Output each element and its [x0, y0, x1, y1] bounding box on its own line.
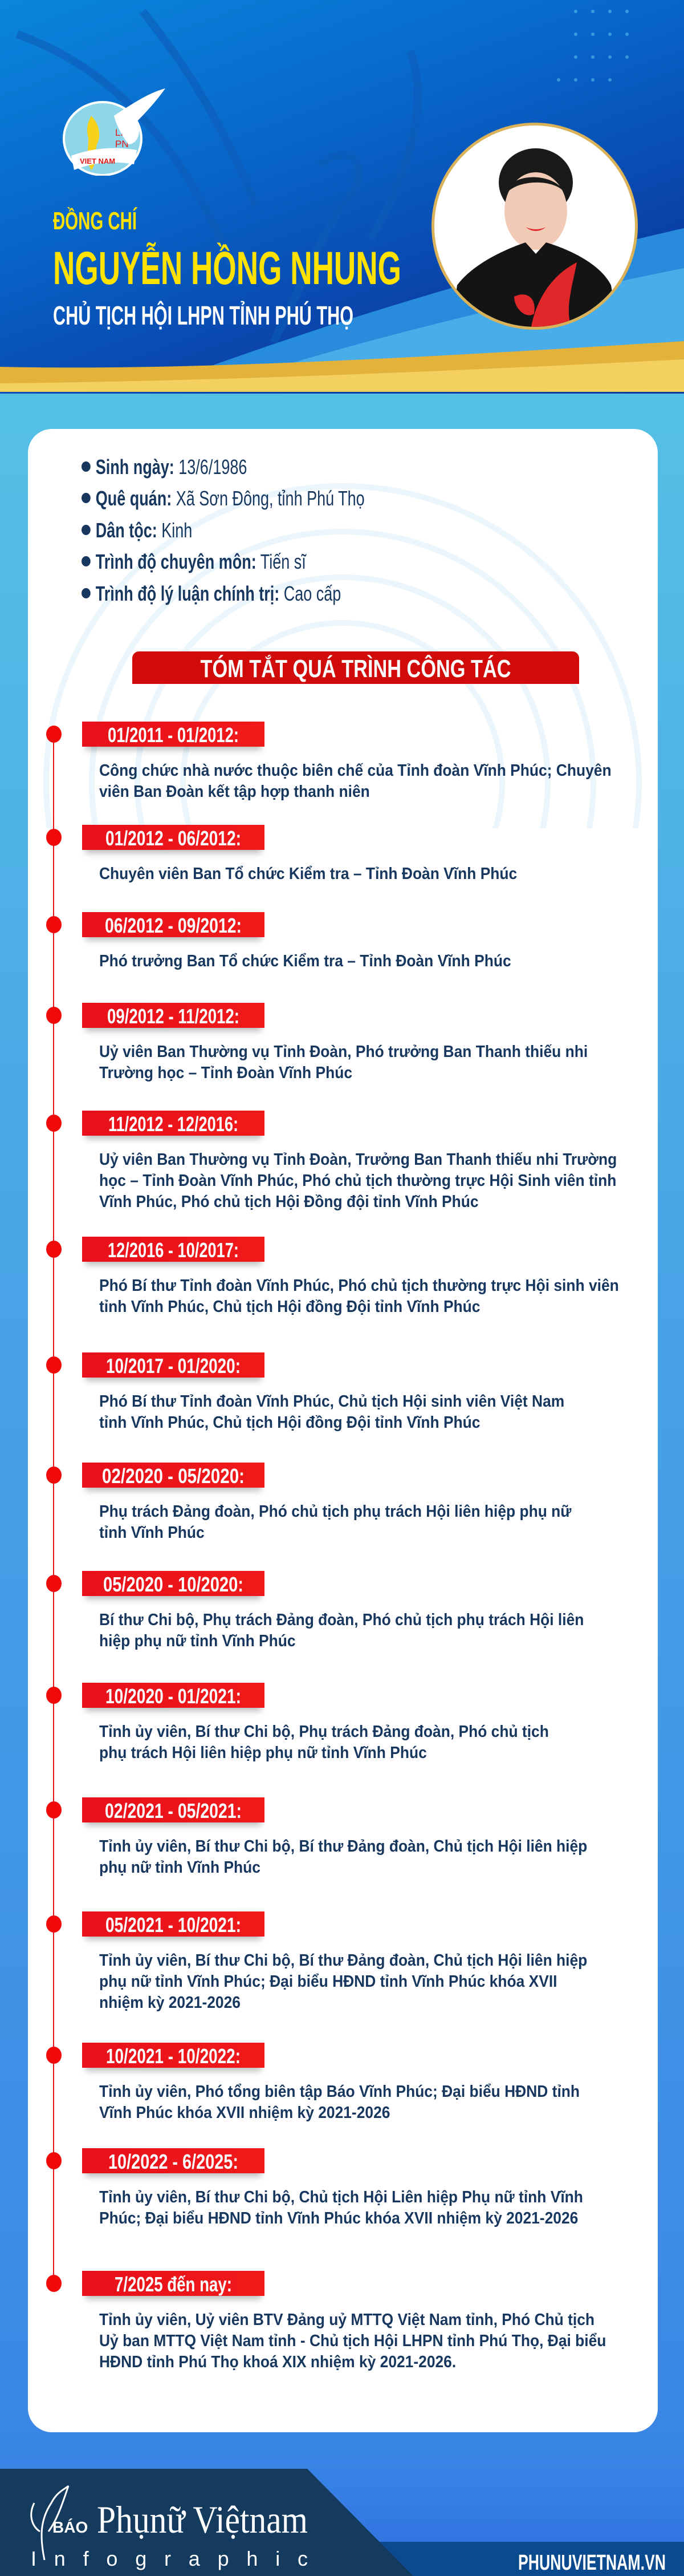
entry 1 [46, 722, 612, 801]
footer [0, 2469, 684, 2576]
timeline entries: Tỉnh ủy viên, Uỷ viên BTV Đảng uỷ MTTQ Việt Nam tỉnh, Phó Chủ tịch [99, 2311, 595, 2329]
info: political level: Trình độ lý luận chính trị: Cao cấp [96, 582, 341, 605]
timeline entries: Uỷ viên Ban Thường vụ Tỉnh Đoàn, Phó trưởng Ban Thanh thiếu nhi [99, 1043, 588, 1061]
timeline entries: nhiệm kỳ 2021-2026 [99, 1994, 241, 2012]
footer logo: Bao Phu nu Viet Nam: BÁO [52, 2518, 88, 2536]
info: ethnicity: Dân tộc: Kinh [96, 519, 192, 542]
timeline entries: tỉnh Vĩnh Phúc [99, 1524, 205, 1542]
timeline entries: Vĩnh Phúc khóa XVII nhiệm kỳ 2021-2026 [99, 2104, 390, 2122]
timeline entries: Tỉnh ủy viên, Bí thư Chi bộ, Phụ trách Đảng đoàn, Phó chủ tịch [99, 1723, 549, 1741]
entry 2 [46, 825, 517, 883]
entry 8 [46, 1463, 571, 1542]
timeline entries: Phúc; Đại biểu HĐND tỉnh Vĩnh Phúc khóa XVII nhiệm kỳ 2021-2026 [99, 2209, 578, 2227]
timeline entries: HĐND tỉnh Phú Thọ khoá XIX nhiệm kỳ 2021-2026. [99, 2353, 456, 2371]
panel: main white card [28, 429, 658, 2432]
timeline entries: Uỷ ban MTTQ Việt Nam tỉnh - Chủ tịch Hội LHPN tỉnh Phú Thọ, Đại biểu [99, 2332, 606, 2350]
title block [53, 206, 401, 330]
entry 10 [46, 1683, 549, 1762]
timeline entries: viên Ban Đoàn kết tập hợp thanh niên [99, 783, 370, 801]
timeline entries: Tỉnh ủy viên, Phó tổng biên tập Báo Vĩnh Phúc; Đại biểu HĐND tỉnh [99, 2083, 580, 2101]
timeline entries: Phó Bí thư Tỉnh đoàn Vĩnh Phúc, Chủ tịch Hội sinh viên Việt Nam [99, 1392, 564, 1411]
timeline entries: Phó Bí thư Tỉnh đoàn Vĩnh Phúc, Phó chủ tịch thường trực Hội sinh viên [99, 1277, 619, 1295]
timeline entries: phụ nữ tỉnh Vĩnh Phúc [99, 1858, 260, 1877]
timeline entries: tỉnh Vĩnh Phúc, Chủ tịch Hội đồng Đội tỉnh Vĩnh Phúc [99, 1298, 480, 1316]
timeline entries: Bí thư Chi bộ, Phụ trách Đảng đoàn, Phó chủ tịch phụ trách Hội liên [99, 1611, 584, 1629]
footer label: Infographic: Infographic [31, 2547, 308, 2570]
timeline entries: Vĩnh Phúc, Phó chủ tịch Hội Đồng đội tỉnh Vĩnh Phúc [99, 1193, 479, 1211]
entry 13 [46, 2043, 580, 2122]
timeline entries: phụ nữ tỉnh Vĩnh Phúc; Đại biểu HĐND tỉnh Vĩnh Phúc khóa XVII [99, 1972, 557, 1991]
timeline entries: Tỉnh ủy viên, Bí thư Chi bộ, Bí thư Đảng đoàn, Chủ tịch Hội liên hiệp [99, 1951, 587, 1970]
timeline entries: tỉnh Vĩnh Phúc, Chủ tịch Hội đồng Đội tỉnh Vĩnh Phúc [99, 1413, 480, 1432]
timeline line [53, 734, 54, 2283]
entry 12 [46, 1911, 587, 2012]
footer logo: leaf mark [31, 2486, 68, 2560]
timeline entries: phụ trách Hội liên hiệp phụ nữ tỉnh Vĩnh Phúc [99, 1744, 427, 1762]
logo: LHPN Viet Nam: PN [115, 139, 129, 149]
timeline entries: Tỉnh ủy viên, Bí thư Chi bộ, Bí thư Đảng đoàn, Chủ tịch Hội liên hiệp [99, 1837, 587, 1856]
logo: LHPN Viet Nam: VIET NAM [80, 157, 115, 165]
entry 4 [46, 1003, 588, 1082]
entry 3 [46, 912, 511, 970]
entry 14 [46, 2148, 583, 2227]
entry 15 [46, 2271, 606, 2371]
timeline entries: Chuyên viên Ban Tổ chức Kiểm tra – Tỉnh Đoàn Vĩnh Phúc [99, 865, 517, 883]
timeline entries: Phó trưởng Ban Tổ chức Kiểm tra – Tỉnh Đoàn Vĩnh Phúc [99, 952, 511, 970]
logo: LHPN Viet Nam: LH [115, 127, 128, 138]
timeline entries: Trường học – Tỉnh Đoàn Vĩnh Phúc [99, 1064, 352, 1082]
timeline entries: 7/2025 đến nay: [115, 2273, 232, 2296]
entry 7 [46, 1352, 564, 1432]
entry 6 [46, 1237, 619, 1316]
info: birth date: Sinh ngày: 13/6/1986 [96, 455, 247, 479]
entry 11 [46, 1797, 587, 1877]
timeline entries: Uỷ viên Ban Thường vụ Tỉnh Đoàn, Trưởng Ban Thanh thiếu nhi Trường [99, 1151, 617, 1169]
entry 5 [46, 1111, 617, 1211]
timeline entries: Phụ trách Đảng đoàn, Phó chủ tịch phụ trách Hội liên hiệp phụ nữ [99, 1502, 571, 1521]
portrait photo [431, 123, 638, 330]
timeline entries: hiệp phụ nữ tỉnh Vĩnh Phúc [99, 1632, 296, 1650]
header banner [0, 0, 684, 394]
footer: Phụnữ Việtnam [97, 2498, 308, 2541]
entry 9 [46, 1571, 584, 1650]
timeline entries: Tỉnh ủy viên, Bí thư Chi bộ, Chủ tịch Hội Liên hiệp Phụ nữ tỉnh Vĩnh [99, 2188, 583, 2206]
info: education: Trình độ chuyên môn: Tiến sĩ [96, 550, 306, 573]
info: hometown: Quê quán: Xã Sơn Đông, tỉnh Phú Thọ [96, 487, 365, 510]
timeline entries: Công chức nhà nước thuộc biên chế của Tỉnh đoàn Vĩnh Phúc; Chuyên [99, 762, 612, 780]
logo: LHPN Viet Nam [63, 88, 165, 176]
timeline entries: học – Tỉnh Đoàn Vĩnh Phúc, Phó chủ tịch thường trực Hội Sinh viên tỉnh [99, 1172, 616, 1190]
title: Dong chi: ĐỒNG CHÍ [53, 206, 137, 235]
